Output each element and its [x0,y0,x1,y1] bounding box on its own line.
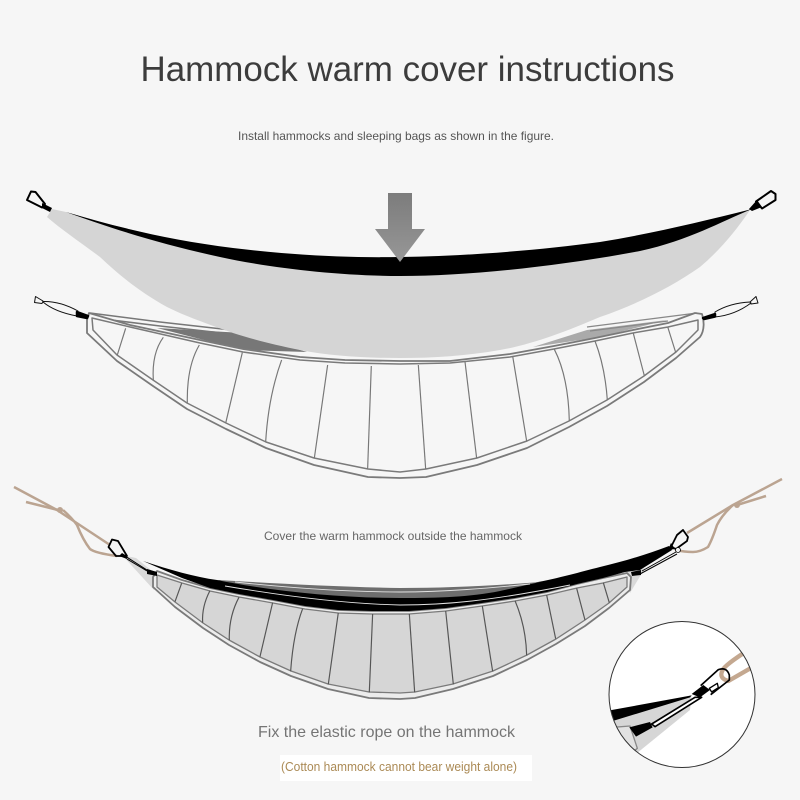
hammock grey underside [47,209,750,358]
callout carabiner [701,669,729,695]
grey hammock tips [122,555,645,593]
quilt left cord loop [34,296,88,318]
hammock white seam lines [225,582,570,605]
assembled quilt baffle lines, right [409,583,609,692]
quilt baffle lines, right [418,327,676,469]
right carabiner and elastic [631,530,688,576]
arrow pointing down [375,193,425,262]
warm cover quilt diagram, uninstalled [34,296,758,478]
left rope [14,487,117,556]
instruction text: fix elastic rope: Fix the elastic rope on the hammock [258,724,516,741]
quilt baffle lines, left [117,328,371,469]
note box [280,755,532,781]
instruction text: install: Install hammocks and sleeping bags as shown in the figure. [238,129,554,143]
quilt outer outline [87,313,704,478]
title: Hammock warm cover instructions [140,50,674,89]
black hammock edge visible above quilt [143,546,672,611]
note text: (Cotton hammock cannot bear weight alone) [281,760,517,774]
quilt inner outline [92,318,698,472]
callout rope [721,650,753,681]
assembled hammock diagram [14,479,782,699]
assembled quilt inner panel [157,575,627,693]
callout knot [692,685,710,697]
callout elastic loop [652,697,702,727]
hammock black edge [66,209,752,276]
callout black binding [629,722,653,737]
left carabiner and elastic [108,540,157,576]
quilt right cord loop [703,296,758,319]
instruction text: cover: Cover the warm hammock outside the hammock [264,529,523,543]
callout quilt corner [617,725,638,750]
hammock diagram, to be lowered [27,191,776,358]
assembled quilt body [153,571,631,699]
callout circle outline [609,622,755,768]
carabiner, right [749,191,776,211]
detail callout circle [608,622,755,768]
callout small loop [709,683,718,692]
carabiner, left [27,192,52,212]
right rope [675,479,782,552]
assembled quilt baffle lines, left [175,583,373,692]
callout black edge [608,695,692,722]
callout hammock grey wedge [610,695,692,753]
hammock top grey band [217,580,540,598]
quilt back panels [90,313,697,352]
